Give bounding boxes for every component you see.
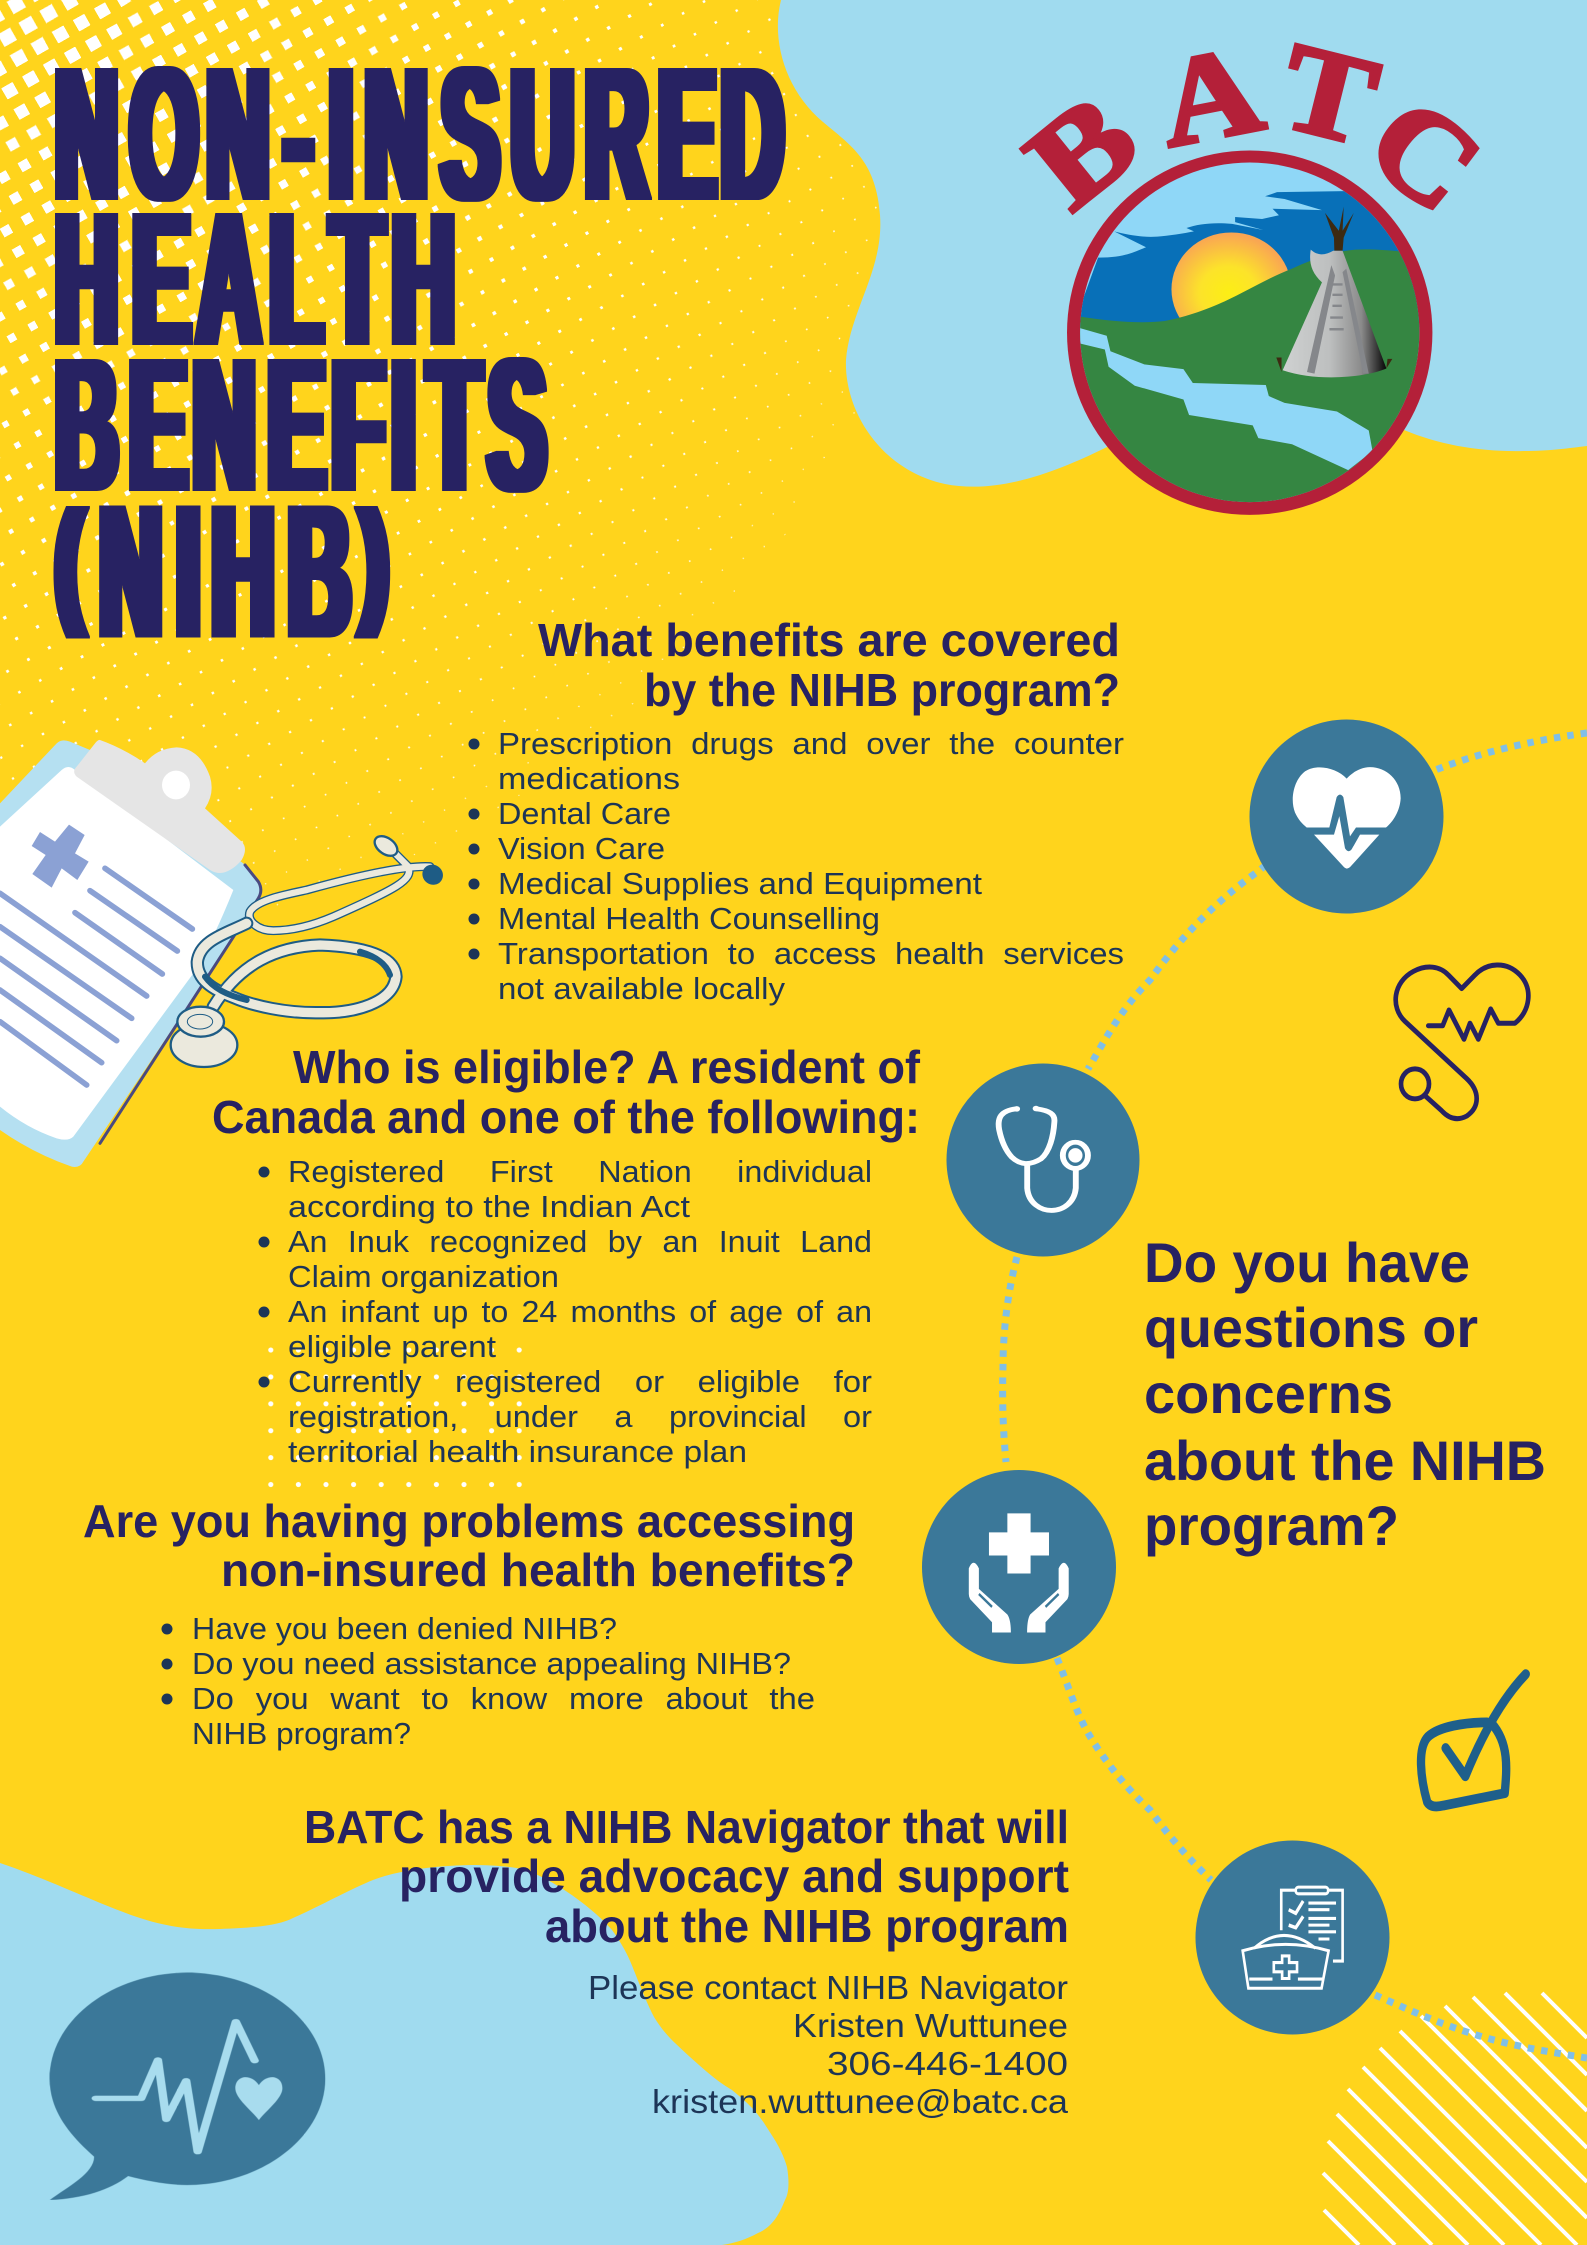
list: eligibility: Claim organization [288,1259,559,1294]
list: covered benefits: Mental Health Counselling [498,901,880,936]
title: HEALTH [55,174,455,385]
clipboard back [0,740,261,1167]
logo lettering: C [1343,70,1506,239]
list: access questions: NIHB program? [192,1716,411,1751]
blue blob top right [778,0,1587,487]
contact details: Kristen Wuttunee [793,2007,1068,2044]
list: eligibility [258,1154,872,1469]
icon: hands and cross in circle [922,1470,1116,1664]
heading: problems accessing benefits: Are you having problems accessing [83,1495,855,1547]
heading: BATC navigator [304,1801,1069,1952]
list: access questions: Have you been denied NIHB? [192,1611,617,1646]
text lines on sheet [0,868,192,1085]
contact details [588,1969,1069,2120]
list: covered benefits: Dental Care [498,796,671,831]
pulse line [96,2022,255,2152]
list: eligibility: registration, under a provincial or [288,1399,872,1434]
stethoscope tubes [197,852,430,1013]
list: access questions [162,1611,815,1751]
clipboard edge lines [0,788,261,1143]
clip hole [162,771,190,799]
logo lettering: A [1147,18,1273,174]
contact details: Please contact NIHB Navigator [588,1969,1068,2006]
logo lettering: B [1002,68,1163,235]
clip [74,740,245,873]
question callout: concerns [1144,1362,1393,1425]
heading: what benefits are covered: by the NIHB program? [644,664,1120,716]
chest piece [171,1007,237,1067]
list: covered benefits: medications [498,761,680,796]
list: covered benefits: Medical Supplies and Equipment [498,866,982,901]
bubble [50,1973,325,2200]
list: eligibility: territorial health insurance plan [288,1434,747,1469]
heading: what benefits are covered: What benefits are covered [538,614,1120,666]
list: eligibility: Currently registered or eligible for [288,1364,872,1399]
cross symbol [32,825,89,888]
heading: BATC navigator: provide advocacy and support [399,1850,1069,1902]
icon: heart stethoscope outline [1396,965,1528,1119]
earpieces [371,832,445,887]
logo emblem [1067,150,1432,515]
heading: problems accessing benefits [83,1495,855,1596]
dotted connector line [1003,733,1587,2058]
logo lettering [1002,17,1506,239]
question callout: questions or [1144,1296,1478,1359]
icon: speech bubble with pulse and heart [50,1973,325,2200]
BATC logo [1018,42,1480,515]
question callout: Do you have [1144,1231,1470,1294]
heading: who is eligible [212,1041,921,1143]
heading: problems accessing benefits: non-insured health benefits? [221,1544,855,1596]
list: eligibility: An Inuk recognized by an Inuit Land [288,1224,872,1259]
list: covered benefits [468,726,1124,1006]
heading: who is eligible: Canada and one of the following: [212,1091,920,1143]
icon: heart in circle [1250,720,1444,914]
blue blob bottom left [0,1863,788,2245]
list: access questions: Do you want to know more about the [192,1681,815,1716]
heading: BATC navigator: about the NIHB program [545,1900,1069,1952]
title: NON-INSURED [55,29,784,240]
list: covered benefits: not available locally [498,971,786,1006]
paper sheet [0,767,233,1140]
white dot grid behind eligibility list [257,1336,533,1498]
heading: BATC navigator: BATC has a NIHB Navigator that will [304,1801,1069,1853]
heading: who is eligible: Who is eligible? A resident of [293,1041,921,1093]
list: eligibility: according to the Indian Act [288,1189,690,1224]
list: eligibility: Registered First Nation individual [288,1154,872,1189]
list: covered benefits: Vision Care [498,831,665,866]
halftone dot pattern top left [0,0,877,906]
title: ) [360,482,389,639]
icon: hand-drawn check box [1421,1674,1526,1806]
question callout [1144,1231,1546,1557]
title: ( [55,482,84,639]
title: NIHB [99,467,351,678]
icon: stethoscope in circle [946,1064,1140,1256]
logo lettering: T [1268,17,1390,173]
contact details: 306-446-1400 [827,2045,1068,2082]
question callout: program? [1144,1494,1399,1557]
list: access questions: Do you need assistance appealing NIHB? [192,1646,791,1681]
heading: what benefits are covered [538,614,1120,716]
list: covered benefits: Prescription drugs and over the counter [498,726,1124,761]
stethoscope illustration [171,832,445,1067]
list: eligibility: eligible parent [288,1329,496,1364]
heart [235,2077,282,2120]
icon: nurse cap and checklist in circle [1196,1840,1390,2034]
title: BENEFITS [55,320,546,531]
contact details: kristen.wuttunee@batc.ca [652,2083,1069,2120]
question callout: about the NIHB [1144,1429,1546,1492]
title [55,29,784,678]
white diagonal stripes bottom right [1323,1993,1587,2245]
clipboard illustration [0,740,261,1167]
list: covered benefits: Transportation to access health services [498,936,1124,971]
list: eligibility: An infant up to 24 months of age of an [288,1294,872,1329]
